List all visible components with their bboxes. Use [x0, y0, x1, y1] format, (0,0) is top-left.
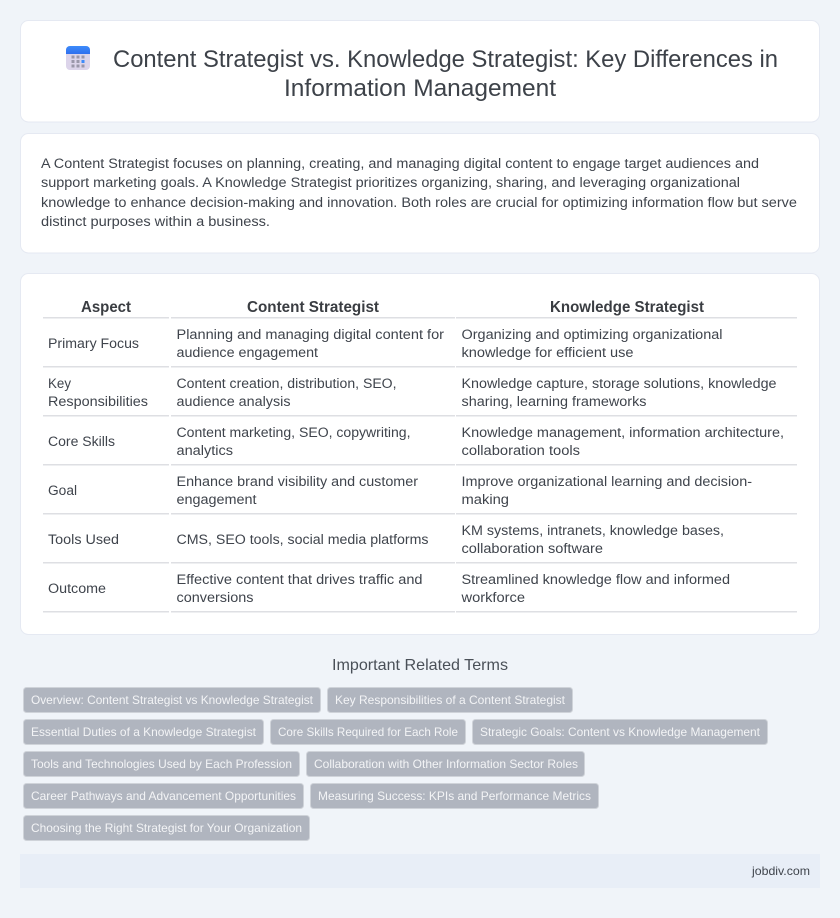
table header: Knowledge Strategist [550, 299, 704, 316]
text block: introduction paragraph: distinct purposes within a business. [41, 214, 270, 230]
row: primary focus: audience engagement [176, 345, 318, 361]
row: key responsibilities: Knowledge capture, storage solutions, knowledge [462, 376, 777, 392]
text block: introduction paragraph: A Content Strategist focuses on planning, creating, and managing digital content to engage target audiences and [41, 156, 759, 172]
row: outcome: Effective content that drives traffic and [176, 572, 422, 588]
row: core skills: Core Skills [48, 434, 115, 450]
tag: Choosing the Right Strategist for Your Organization [31, 821, 302, 835]
row: primary focus [48, 327, 722, 361]
row: tools used [48, 523, 724, 557]
row: core skills [48, 425, 784, 459]
icon: calendar [66, 46, 90, 70]
row: primary focus: Planning and managing digital content for [176, 327, 444, 343]
row: outcome [48, 572, 730, 606]
row: key responsibilities: Key [48, 376, 72, 392]
panel: introduction [20, 134, 820, 253]
table header: Content Strategist [247, 299, 379, 316]
row: key responsibilities: audience analysis [176, 394, 290, 410]
tag: Tools and Technologies Used by Each Profession [31, 757, 292, 771]
row: core skills: Content marketing, SEO, copywriting, [176, 425, 410, 441]
panel: title header [20, 20, 820, 122]
row: goal: Enhance brand visibility and customer [176, 474, 418, 490]
row: core skills: analytics [176, 443, 233, 459]
tag [328, 688, 572, 712]
heading: important related terms: Important Related Terms [332, 657, 508, 674]
row: key responsibilities: sharing, learning frameworks [462, 394, 646, 410]
tag [24, 784, 304, 808]
row: primary focus: knowledge for efficient use [462, 345, 634, 361]
tag: Collaboration with Other Information Sector Roles [314, 757, 578, 771]
row: tools used: CMS, SEO tools, social media platforms [176, 532, 428, 548]
row: primary focus: Organizing and optimizing organizational [462, 327, 722, 343]
row: outcome: Streamlined knowledge flow and informed [462, 572, 730, 588]
text block: introduction paragraph [41, 156, 797, 230]
row: goal: making [462, 492, 509, 508]
table header: Aspect [81, 299, 131, 316]
row: core skills: collaboration tools [462, 443, 580, 459]
text block: introduction paragraph: support marketing goals. A Knowledge Strategist prioritizes organizing, sharing, and leveraging organizational [41, 175, 740, 191]
table header [81, 299, 704, 316]
tag [24, 688, 320, 712]
tag: Essential Duties of a Knowledge Strategist [31, 725, 257, 739]
tag: Core Skills Required for Each Role [278, 725, 458, 739]
row: tools used: collaboration software [462, 541, 603, 557]
row: key responsibilities: Responsibilities [48, 394, 148, 410]
row: primary focus: Primary Focus [48, 336, 139, 352]
tag: Measuring Success: KPIs and Performance Metrics [318, 789, 591, 803]
tags: related terms [24, 688, 768, 840]
row: core skills: Knowledge management, information architecture, [462, 425, 784, 441]
title: Content Strategist vs. Knowledge Strategist: Key Differences in [113, 46, 778, 73]
row: key responsibilities [48, 376, 777, 410]
row: goal: Goal [48, 483, 77, 499]
row: goal: Improve organizational learning and decision- [462, 474, 752, 490]
tag [472, 720, 768, 744]
footer: source: jobdiv.com [751, 864, 810, 878]
row: outcome: conversions [176, 590, 254, 606]
row: tools used: Tools Used [48, 532, 119, 548]
title: Information Management [284, 75, 556, 102]
tag: Career Pathways and Advancement Opportunities [31, 789, 296, 803]
tag: Strategic Goals: Content vs Knowledge Management [480, 725, 761, 739]
tag: Overview: Content Strategist vs Knowledge Strategist [31, 693, 314, 707]
tag [24, 816, 310, 840]
footer bar [20, 854, 820, 888]
row: outcome: workforce [460, 590, 525, 606]
tag [24, 752, 300, 776]
text block: introduction paragraph: knowledge to enhance decision-making and innovation. Both roles are crucial for optimizing information flow but serve [41, 195, 797, 211]
row: outcome: Outcome [48, 581, 106, 597]
title [113, 46, 778, 102]
tag: Key Responsibilities of a Content Strategist [335, 693, 566, 707]
row: goal [48, 474, 752, 508]
row: key responsibilities: Content creation, distribution, SEO, [176, 376, 396, 392]
tag [270, 720, 466, 744]
row: goal: engagement [176, 492, 257, 508]
tag [24, 720, 264, 744]
tag [306, 752, 584, 776]
panel: comparison table [20, 274, 820, 634]
row: tools used: KM systems, intranets, knowledge bases, [462, 523, 724, 539]
tag [310, 784, 598, 808]
